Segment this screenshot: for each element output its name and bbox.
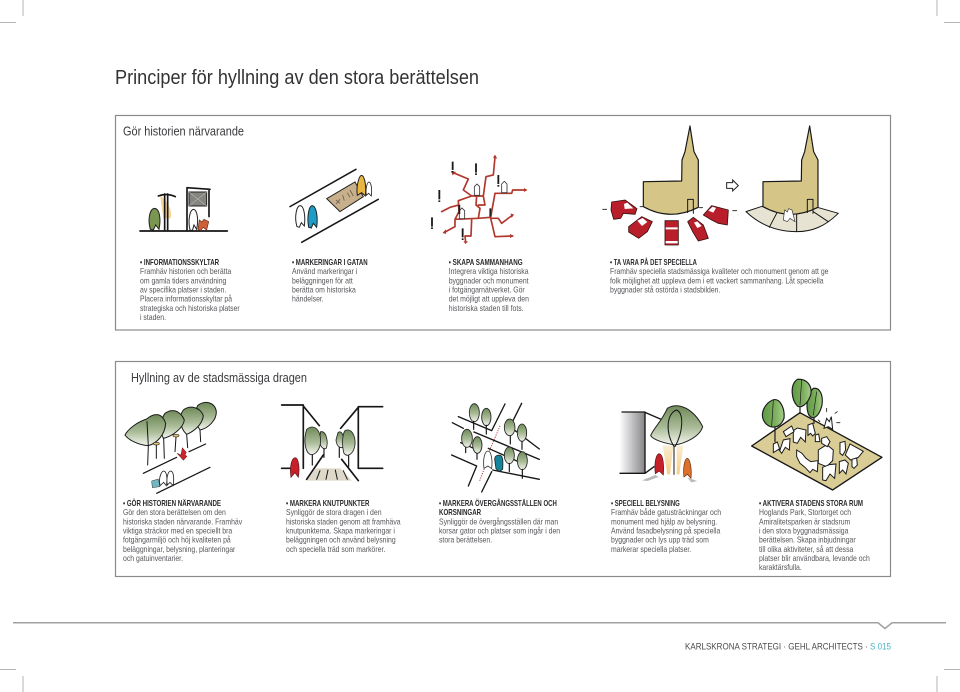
text: skapa sammanhang: det möjligt att uppleva den — [449, 294, 529, 304]
text: ta vara på det speciella — [610, 257, 829, 295]
text: ta vara på det speciella: Framhäv speciella stadsmässiga kvaliteter och monument genom att ge — [610, 267, 829, 276]
text: speciell belysning: markerar speciella platser. — [611, 544, 691, 554]
text: markeringar i gatan: beläggningen för att — [292, 276, 354, 285]
text: gör historien närvarande — [123, 498, 242, 563]
icon: active city square — [752, 379, 882, 490]
text: markera övergångsställen: KORSNINGAR — [439, 508, 482, 517]
text: gör historien närvarande: viktiga sträckor med en speciellt bra — [123, 526, 233, 536]
icon: node with trees and crossing — [282, 405, 383, 481]
text: markera övergångsställen: korsar gator och platser som ingår i den — [439, 526, 560, 536]
text: speciell belysning: Använd fasadbelysning på speciella — [611, 526, 721, 536]
text: markera knutpunkter: Synliggör de stora dragen i den — [286, 508, 382, 517]
text: markera övergångsställen — [439, 498, 560, 545]
text: ta vara på det speciella: folk möjlighet att uppleva dem i ett vackert sammanhang. Låt speciella — [610, 276, 824, 285]
text: markeringar i gatan — [292, 257, 368, 304]
icon: street markings — [290, 169, 378, 242]
text: informationsskyltar: strategiska och historiska platser — [140, 303, 240, 313]
text: markeringar i gatan: Använd markeringar i — [292, 267, 358, 276]
text: gör historien närvarande: och gatuinventarier. — [123, 553, 183, 563]
text: skapa sammanhang: byggnader och monument — [449, 276, 529, 285]
text: aktivera stadens stora rum: karaktärsfulla. — [759, 563, 802, 572]
text: skapa sammanhang: Integrera viktiga historiska — [449, 267, 529, 276]
text: markera knutpunkter: • MARKERA KNUTPUNKTER — [286, 498, 370, 508]
panel heading: Hyllning av de stadsmässiga dragen — [131, 371, 307, 385]
text: aktivera stadens stora rum: Hoglands Park, Stortorget och — [759, 508, 851, 517]
church with plaza — [746, 126, 838, 232]
text: gör historien närvarande: historiska staden närvarande. Framhäv — [123, 517, 242, 526]
text: informationsskyltar: Framhäv historien och berätta — [140, 267, 232, 276]
text: skapa sammanhang: historiska staden till fots. — [449, 303, 524, 313]
text: aktivera stadens stora rum: berättelsen. Skapa inbjudningar — [759, 535, 856, 545]
text: markera knutpunkter — [286, 498, 401, 554]
text: gör historien närvarande: fotgängarmiljö och höj kvaliteten på — [123, 535, 232, 545]
icon: crossings plan — [452, 403, 539, 492]
arrow — [727, 180, 738, 191]
text: aktivera stadens stora rum: Amiralitetsparken är stadsrum — [759, 517, 850, 526]
text: markera övergångsställen: stora berättelsen. — [439, 535, 492, 545]
church with cars — [603, 126, 737, 245]
text: markera knutpunkter: beläggningen och använd belysning — [286, 535, 396, 545]
footer text: KARLSKRONA STRATEGI · GEHL ARCHITECTS · S 015 — [685, 642, 891, 652]
text: gör historien närvarande: • GÖR HISTORIEN NÄRVARANDE — [123, 498, 221, 508]
panel heading: Gör historien närvarande — [123, 124, 244, 138]
text: informationsskyltar — [140, 257, 240, 322]
text: markera övergångsställen: • MARKERA ÖVERGÅNGSSTÄLLEN OCH — [439, 498, 557, 508]
text: ta vara på det speciella: byggnader stå ostörda i stadsbilden. — [610, 285, 720, 295]
text: speciell belysning — [611, 498, 721, 554]
text: skapa sammanhang: i fotgängarnätverket. Gör — [449, 285, 525, 295]
icon: tree-lined street — [125, 402, 216, 493]
title: Principer för hyllning av den stora berättelsen — [115, 67, 479, 89]
text: markeringar i gatan: • MARKERINGAR I GATAN — [292, 257, 368, 267]
text: informationsskyltar: i staden. — [140, 312, 166, 322]
text: informationsskyltar: • INFORMATIONSSKYLTAR — [140, 257, 220, 267]
text: speciell belysning: Framhäv både gatusträckningar och — [611, 508, 721, 517]
text: gör historien närvarande: beläggningar, belysning, planteringar — [123, 544, 236, 554]
text: informationsskyltar: Placera informationsskyltar på — [140, 294, 233, 304]
text: markera knutpunkter: historiska staden genom att framhäva — [286, 517, 401, 526]
text: speciell belysning: • SPECIELL BELYSNING — [611, 498, 680, 508]
text: aktivera stadens stora rum: till olika aktiviteter, så att dessa — [759, 544, 854, 554]
icon: special lighting — [619, 406, 703, 482]
text: aktivera stadens stora rum: • AKTIVERA STADENS STORA RUM — [759, 498, 863, 508]
text: markeringar i gatan: händelser. — [292, 294, 324, 304]
text: markera knutpunkter: och speciella träd som markörer. — [286, 544, 385, 554]
text: informationsskyltar: om gamla tiders användning — [140, 276, 226, 285]
text: informationsskyltar: av specifika platser i staden. — [140, 285, 226, 295]
text: speciell belysning: monument med hjälp av belysning. — [611, 517, 717, 526]
text: skapa sammanhang — [449, 257, 529, 313]
icon: church with cars and church with plaza — [603, 126, 838, 245]
text: aktivera stadens stora rum: i den stora byggnadsmässiga — [759, 526, 849, 536]
footer rule with notch — [13, 623, 946, 628]
text: ta vara på det speciella: • TA VARA PÅ DET SPECIELLA — [610, 257, 697, 267]
text: aktivera stadens stora rum: platser blir användbara, levande och — [759, 553, 870, 563]
text: aktivera stadens stora rum — [759, 498, 870, 572]
text: markeringar i gatan: berätta om historiska — [292, 285, 357, 295]
text: skapa sammanhang: • SKAPA SAMMANHANG — [449, 257, 523, 267]
text: markera knutpunkter: knutpunkterna. Skapa markeringar i — [286, 526, 395, 536]
icon: information signs — [140, 188, 227, 231]
panel: Gör historien närvarande — [116, 116, 890, 330]
icon: walking network map — [432, 155, 527, 244]
panel: Hyllning av de stadsmässiga dragen — [116, 362, 890, 576]
text: markera övergångsställen: Synliggör de övergångsställen där man — [439, 517, 558, 526]
text: gör historien närvarande: Gör den stora berättelsen om den — [123, 508, 226, 517]
text: speciell belysning: byggnader och lys upp träd som — [611, 535, 709, 545]
